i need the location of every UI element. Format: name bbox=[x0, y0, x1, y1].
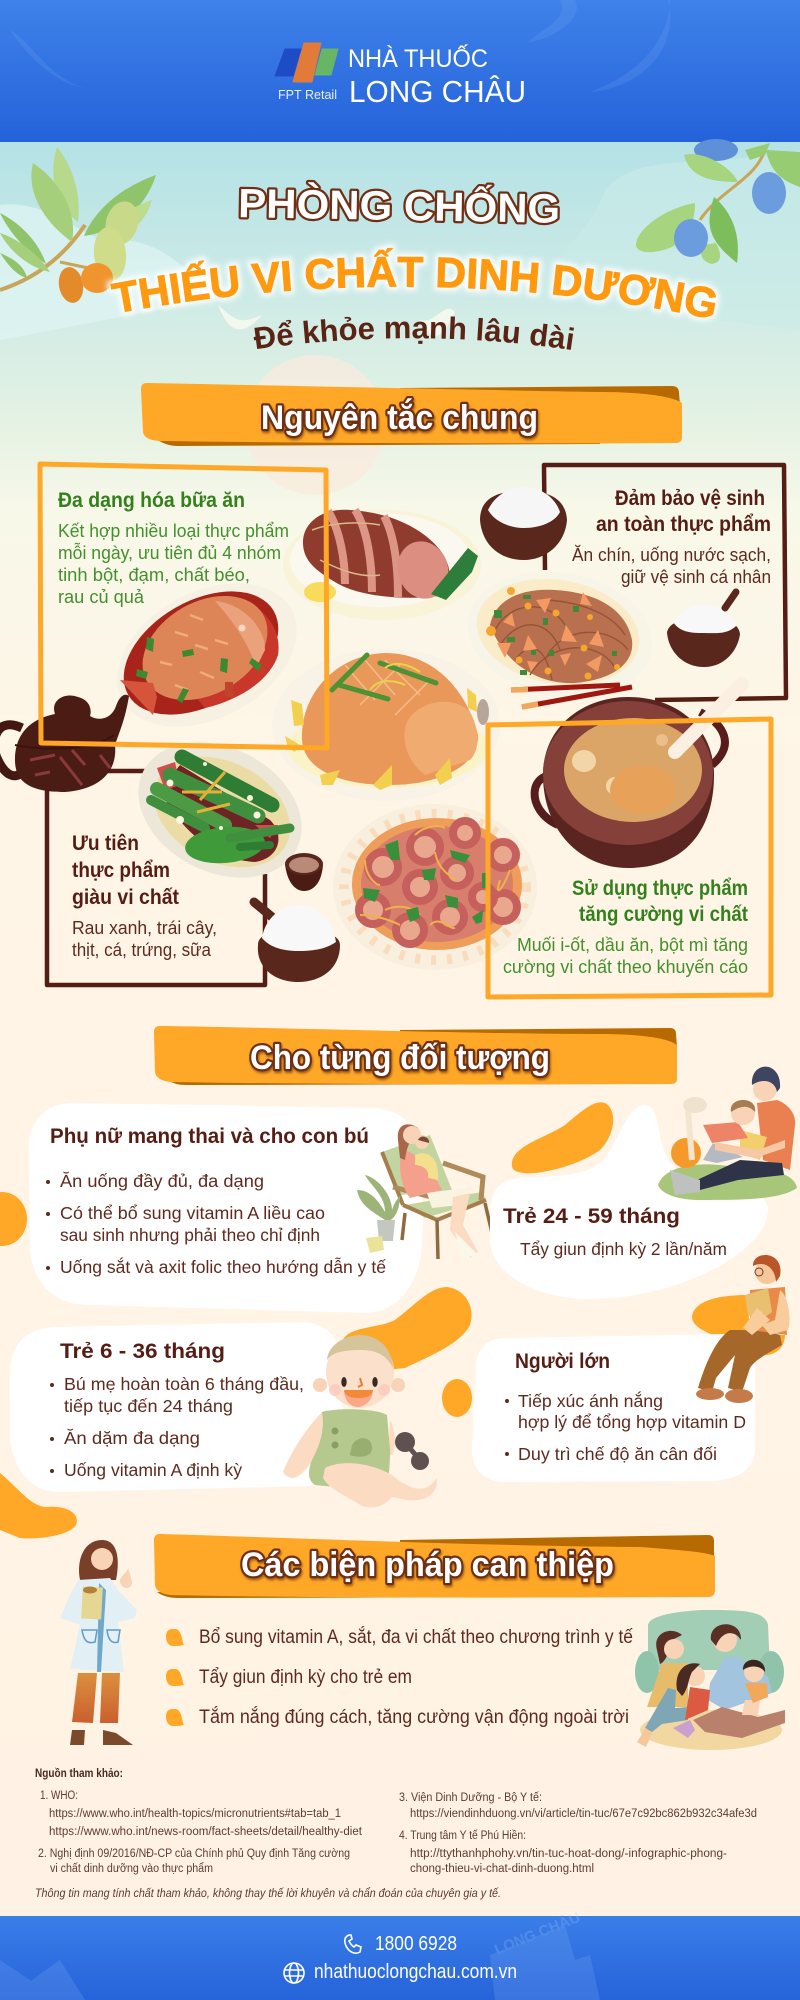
intervention item 3: Tắm nắng đúng cách, tăng cường vận động ngoài trời bbox=[199, 1706, 629, 1728]
illustration: roast chicken plate bbox=[272, 649, 500, 801]
panel: adults bbox=[472, 1334, 755, 1482]
text block: diversify meals: tinh bột, đạm, chất béo, bbox=[58, 565, 250, 585]
illustration: small rice bowl with spoon bbox=[667, 592, 740, 667]
logo: FPT Retail mark bbox=[275, 43, 338, 102]
bullet list bbox=[50, 1374, 304, 1480]
references left column: 2. Nghị định 09/2016/NĐ-CP của Chính phủ Quy định Tăng cường bbox=[38, 1848, 350, 1860]
bullet list: Uống sắt và axit folic theo hướng dẫn y tế bbox=[60, 1256, 386, 1277]
illustration: noodles plate bbox=[458, 558, 662, 712]
illustration: baby with dumbbell bbox=[283, 1335, 437, 1507]
text block: diversify meals: mỗi ngày, ưu tiên đủ 4 nhóm bbox=[58, 542, 281, 563]
leaves and blueberry branch top right bbox=[636, 139, 800, 264]
illustration: seated man with glasses bbox=[696, 1255, 790, 1403]
panel: adults: Người lớn bbox=[515, 1350, 610, 1373]
text block: nutrient-rich foods bbox=[72, 832, 217, 960]
panel: children 24-59 months bbox=[490, 1105, 768, 1299]
text block: diversify meals: Đa dạng hóa bữa ăn bbox=[58, 489, 245, 512]
text block: nutrient-rich foods: thịt, cá, trứng, sữa bbox=[72, 940, 212, 960]
intervention item 1: Bổ sung vitamin A, sắt, đa vi chất theo chương trình y tế bbox=[199, 1626, 633, 1648]
references left column: 1. WHO: bbox=[40, 1790, 78, 1802]
text block: diversify meals: Kết hợp nhiều loại thực phẩm bbox=[58, 521, 289, 541]
illustration: father reading to child bbox=[658, 1067, 797, 1200]
references left column bbox=[38, 1790, 363, 1875]
bullet list bbox=[505, 1390, 746, 1464]
references right column: https://viendinhduong.vn/vi/article/tin-tuc/67e7c92bc862b932c34afe3d bbox=[410, 1808, 757, 1820]
orange decorative blobs bbox=[0, 1102, 785, 1538]
bullet list: Bú mẹ hoàn toàn 6 tháng đầu, bbox=[64, 1374, 304, 1394]
text block: food safety: Ăn chín, uống nước sạch, bbox=[572, 545, 771, 565]
footer watermark: LONG CHÂU bbox=[492, 1908, 583, 1959]
bullet list: Tiếp xúc ánh nắng bbox=[518, 1390, 663, 1411]
logo: store name: LONG CHÂU bbox=[349, 74, 526, 109]
bullet list: Duy trì chế độ ăn cân đối bbox=[518, 1444, 717, 1464]
icon: globe bbox=[284, 1963, 304, 1983]
panel: pregnant and breastfeeding women: Phụ nữ mang thai và cho con bú bbox=[50, 1125, 369, 1148]
text block: nutrient-rich foods: thực phẩm bbox=[72, 859, 170, 882]
text block: fortified foods: Muối i-ốt, dầu ăn, bột mì tăng bbox=[517, 935, 748, 955]
references right column: 4. Trung tâm Y tế Phú Hiền: bbox=[399, 1830, 526, 1842]
banner: Cho từng đối tượng bbox=[154, 1026, 677, 1085]
illustration: teapot bbox=[0, 695, 129, 792]
references left column: https://www.who.int/health-topics/micronutrients#tab=tab_1 bbox=[49, 1808, 341, 1820]
references bbox=[35, 1768, 757, 1900]
title line: subtitle: Để khỏe mạnh lâu dài bbox=[254, 316, 574, 350]
references right column: http://ttythanhphohy.vn/tin-tuc-hoat-dong/-infographic-phong- bbox=[410, 1848, 727, 1860]
illustration: soup pot bbox=[535, 684, 742, 868]
illustration: rice bowl bottom bbox=[254, 902, 340, 982]
logo: FPT Retail mark: FPT Retail bbox=[278, 87, 337, 102]
footer watermark bbox=[0, 1908, 600, 2000]
text block: fortified foods bbox=[503, 877, 748, 977]
text block: fortified foods: cường vi chất theo khuyến cáo bbox=[503, 957, 748, 977]
references left column: https://www.who.int/news-room/fact-sheets/detail/healthy-diet bbox=[49, 1826, 363, 1838]
text block: food safety: giữ vệ sinh cá nhân bbox=[621, 567, 771, 587]
footer bar bbox=[0, 1908, 800, 2000]
title line: PHÒNG CHỐNG: PHÒNG CHỐNG bbox=[238, 180, 561, 232]
bullet list: Uống vitamin A định kỳ bbox=[64, 1460, 242, 1480]
illustration: fish plate bbox=[93, 554, 321, 756]
banner: Các biện pháp can thiệp: Các biện pháp can thiệp bbox=[241, 1546, 614, 1584]
references right column: 3. Viện Dinh Dưỡng - Bộ Y tế: bbox=[399, 1792, 542, 1804]
references left column: vi chất dinh dưỡng vào thực phẩm bbox=[50, 1863, 213, 1875]
panel: children 6-36 months bbox=[10, 1322, 345, 1492]
illustration: rice bowl top bbox=[480, 487, 567, 560]
text block: nutrient-rich foods: giàu vi chất bbox=[72, 886, 179, 909]
illustration: doctor bbox=[60, 1540, 137, 1745]
text block: nutrient-rich foods: Rau xanh, trái cây, bbox=[72, 918, 217, 938]
banner: Cho từng đối tượng: Cho từng đối tượng bbox=[250, 1039, 550, 1077]
text block: fortified foods: Sử dụng thực phẩm bbox=[572, 877, 748, 900]
logo: store name: NHÀ THUỐC bbox=[348, 43, 488, 73]
logo: store name bbox=[348, 43, 526, 109]
text block: fortified foods: tăng cường vi chất bbox=[579, 903, 748, 926]
icon: phone bbox=[345, 1935, 361, 1953]
text block: diversify meals bbox=[58, 489, 289, 607]
references right column bbox=[399, 1792, 757, 1875]
illustration: small cup bbox=[285, 853, 323, 891]
illustration: sliced ham plate bbox=[283, 510, 481, 620]
illustration: green vegetable plate bbox=[115, 716, 325, 904]
phone number: 1800 6928 bbox=[375, 1933, 457, 1955]
bullet list: hợp lý để tổng hợp vitamin D bbox=[518, 1412, 746, 1432]
panel: children 24-59 months: Tẩy giun định kỳ 2 lần/năm bbox=[520, 1239, 727, 1259]
website: nhathuoclongchau.com.vn bbox=[314, 1961, 517, 1983]
text block: food safety: Đảm bảo vệ sinh bbox=[615, 487, 765, 510]
references right column: chong-thieu-vi-chat-dinh-duong.html bbox=[410, 1863, 594, 1875]
bullet list: sau sinh nhưng phải theo chỉ định bbox=[60, 1225, 320, 1245]
illustration: mother with baby on chair and plant bbox=[357, 1124, 492, 1259]
panel: pregnant and breastfeeding women bbox=[29, 1103, 423, 1313]
title line: THIẾU VI CHẤT DINH DƯƠNG: THIẾU VI CHẤT DINH DƯƠNG bbox=[102, 242, 722, 322]
title bbox=[102, 180, 722, 350]
bullet list bbox=[46, 1171, 386, 1277]
text block: food safety bbox=[572, 487, 771, 587]
background clouds and sun bbox=[0, 150, 800, 495]
text block: diversify meals: rau củ quả bbox=[58, 587, 145, 607]
illustration: chopsticks bbox=[511, 685, 632, 707]
text block: nutrient-rich foods: Ưu tiên bbox=[72, 832, 139, 855]
header bar bbox=[0, 0, 800, 142]
orange frame: diversify meals bbox=[40, 464, 327, 748]
banner: Nguyên tắc chung: Nguyên tắc chung bbox=[261, 399, 538, 437]
intervention item 2: Tẩy giun định kỳ cho trẻ em bbox=[199, 1667, 412, 1688]
bullet list: Ăn dặm đa dạng bbox=[64, 1428, 200, 1448]
disclaimer: Thông tin mang tính chất tham khảo, không thay thế lời khuyên và chẩn đoán của chuyên gia y tế. bbox=[35, 1888, 501, 1900]
panel: children 24-59 months: Trẻ 24 - 59 tháng bbox=[503, 1205, 680, 1228]
orange frame: fortified foods bbox=[488, 719, 771, 997]
banner: Nguyên tắc chung bbox=[141, 383, 682, 446]
dark frame: food safety bbox=[544, 465, 786, 700]
bullet list: Ăn uống đầy đủ, đa dạng bbox=[60, 1171, 264, 1191]
panel: children 6-36 months: Trẻ 6 - 36 tháng bbox=[60, 1340, 225, 1363]
bullet list: tiếp tục đến 24 tháng bbox=[64, 1396, 233, 1416]
banner: Các biện pháp can thiệp bbox=[154, 1534, 715, 1598]
illustration: meat and onion plate bbox=[333, 804, 537, 970]
leaves and fruit branch top left bbox=[0, 147, 156, 305]
dark frame: nutrient-rich foods bbox=[47, 771, 265, 985]
bullet list: Có thể bổ sung vitamin A liều cao bbox=[60, 1203, 325, 1223]
text block: food safety: an toàn thực phẩm bbox=[596, 513, 771, 536]
references: Nguồn tham khảo: bbox=[35, 1768, 123, 1780]
title line: THIẾU VI CHẤT DINH DƯƠNG: THIẾU VI CHẤT DINH DƯƠNG bbox=[110, 248, 716, 318]
illustration: family on sofa bbox=[635, 1610, 785, 1750]
intervention list bbox=[166, 1626, 633, 1728]
